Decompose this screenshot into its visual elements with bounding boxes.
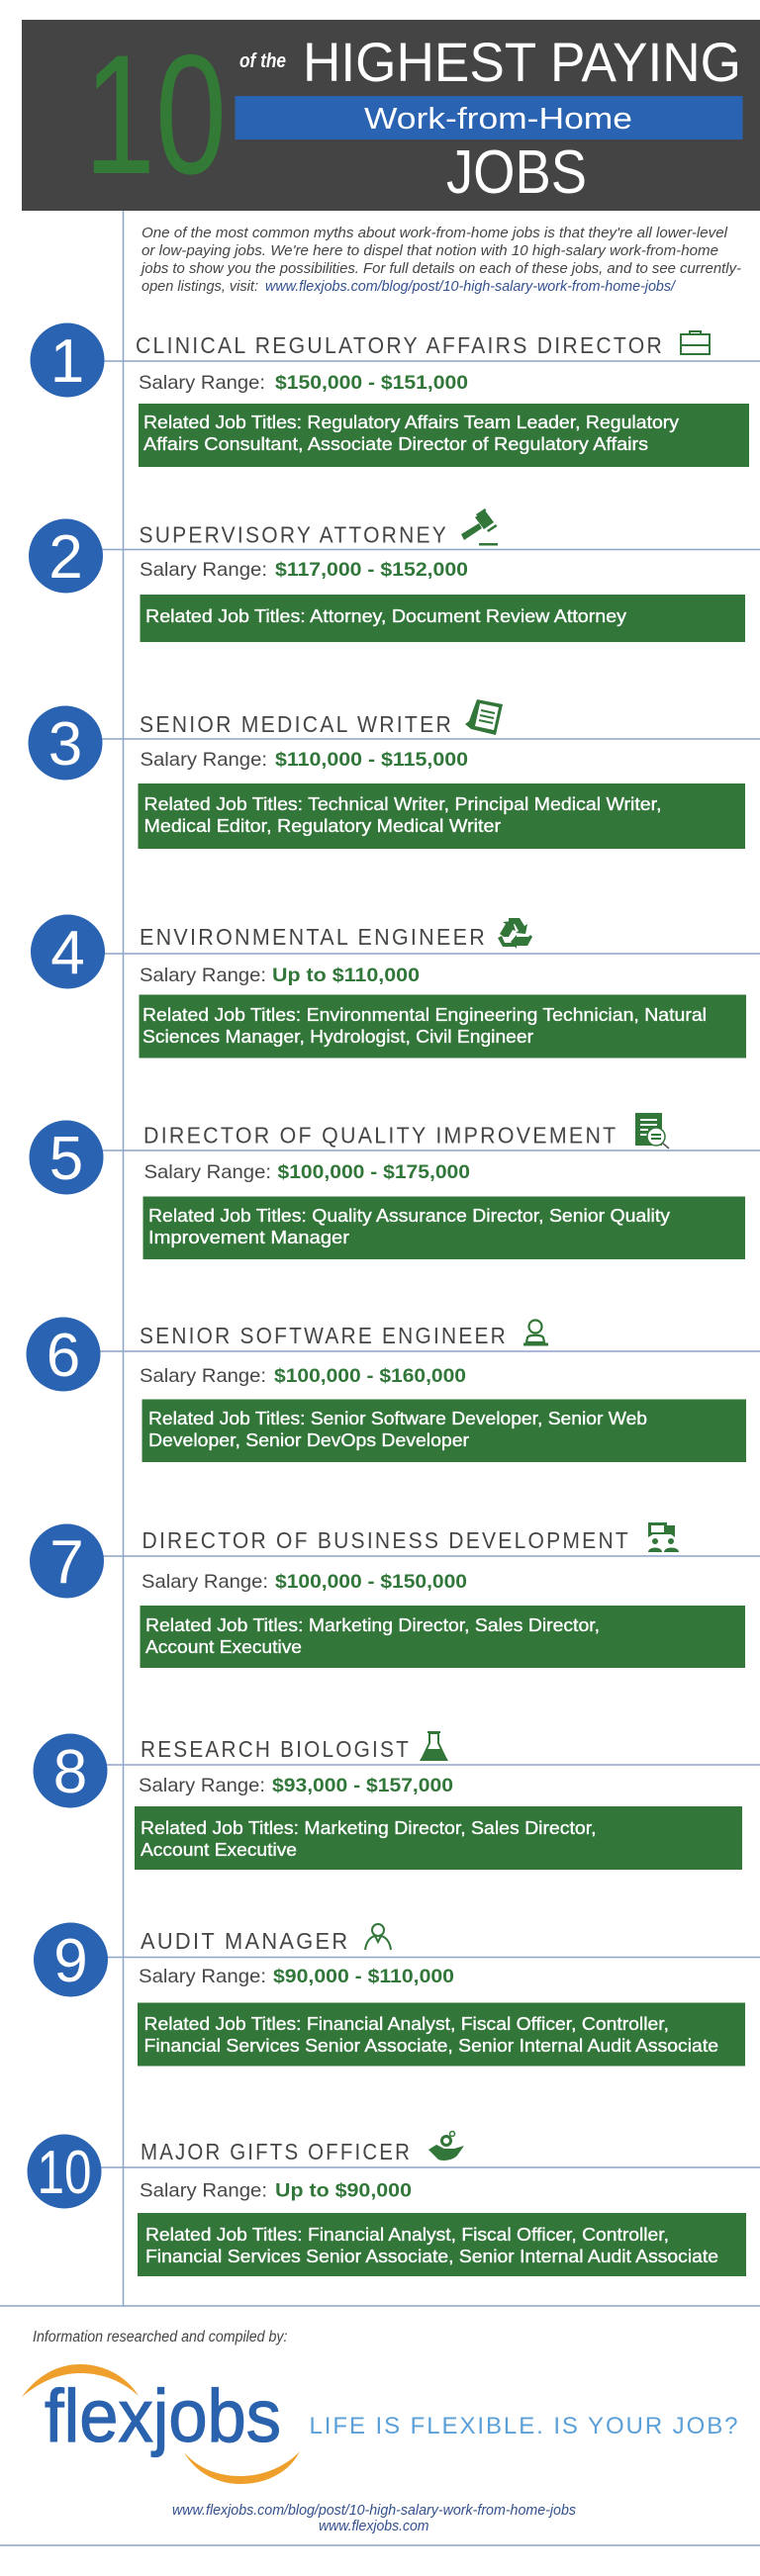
heading: highest paying: HIGHEST PAYING [303,31,741,93]
blue work-from-home band [236,96,742,139]
icon: recycle [498,918,532,949]
salary range 4: Salary Range: [140,965,266,986]
job title 9: AUDIT MANAGER [141,1928,350,1954]
salary range 9: Salary Range: [139,1966,266,1987]
salary range 8: Salary Range: [139,1775,265,1796]
job 3: senior medical writer [28,699,760,849]
related titles 3 [139,783,745,849]
job title 8: RESEARCH BIOLOGIST [141,1736,411,1762]
icon: person with laptop [523,1320,548,1344]
salary range 6: Salary Range: [140,1365,266,1387]
icon: flask [420,1732,448,1761]
job 7: director of business development [30,1522,760,1668]
job 6: senior software engineer [26,1318,760,1462]
salary range 7: Salary Range: [142,1571,268,1593]
job 2: supervisory attorney [29,508,760,642]
salary range 6 [140,1365,466,1387]
footer links [172,2503,576,2534]
related titles 7 [141,1606,745,1668]
related titles 1: Related Job Titles: Regulatory Affairs Team Leader, Regulatory [143,412,680,432]
salary range 1: $150,000 - $151,000 [275,372,468,394]
related titles 7: Account Executive [145,1636,302,1657]
salary range 6: $100,000 - $160,000 [274,1365,466,1387]
number badge 4: 4 [50,919,85,987]
intro text [140,226,741,295]
job title 1: CLINICAL REGULATORY AFFAIRS DIRECTOR [136,332,664,358]
flexjobs logo: flexjobs [45,2374,281,2457]
number badge 4 [31,914,105,989]
number badge 3: 3 [48,710,82,779]
intro text: www.flexjobs.com/blog/post/10-high-salary-work-from-home-jobs/ [265,279,677,295]
job title 7: DIRECTOR OF BUSINESS DEVELOPMENT [142,1527,630,1553]
intro text: One of the most common myths about work-from-home jobs is that they're all lower-level [142,226,728,241]
salary range 8: $93,000 - $157,000 [272,1775,453,1796]
related titles 4: Related Job Titles: Environmental Engineering Technician, Natural [142,1004,707,1025]
related titles 1: Affairs Consultant, Associate Director of Regulatory Affairs [143,433,648,454]
job title 6: SENIOR SOFTWARE ENGINEER [140,1323,508,1348]
number badge 2: 2 [48,523,83,592]
icon: meeting [648,1522,679,1552]
icon: document with magnifier [635,1113,669,1149]
number badge 6 [26,1318,101,1391]
footer links: www.flexjobs.com/blog/post/10-high-salary-work-from-home-jobs [172,2503,576,2519]
salary range 7: $100,000 - $150,000 [275,1571,467,1593]
icon: person [365,1924,391,1950]
salary range 3 [141,749,468,771]
job title 10: MAJOR GIFTS OFFICER [141,2139,412,2164]
number badge 9 [34,1923,108,1996]
salary range 5: Salary Range: [144,1161,271,1183]
related titles 7: Related Job Titles: Marketing Director, Sales Director, [145,1614,600,1635]
icon: document [465,699,503,735]
number badge 7: 7 [49,1528,84,1597]
job title 2: SUPERVISORY ATTORNEY [139,522,448,548]
big number 10: 10 [84,20,227,210]
job 10: major gifts officer [28,2131,760,2276]
related titles 2: Related Job Titles: Attorney, Document Review Attorney [145,605,627,626]
salary range 2: Salary Range: [140,559,267,581]
number badge 9: 9 [53,1927,88,1995]
related titles 3: Medical Editor, Regulatory Medical Writer [144,815,501,836]
number badge 3 [28,706,103,780]
related titles 3: Related Job Titles: Technical Writer, Principal Medical Writer, [144,793,661,814]
related titles 5: Related Job Titles: Quality Assurance Director, Senior Quality [148,1205,671,1226]
credit line: Information researched and compiled by: [33,2329,287,2346]
number badge 6: 6 [47,1322,80,1390]
related titles 9 [138,2002,745,2066]
number badge 8: 8 [53,1738,87,1806]
related titles 1 [139,404,749,467]
salary range 10 [140,2180,412,2202]
salary range 2: $117,000 - $152,000 [275,559,468,581]
blue work-from-home band: Work-from-Home [364,101,632,136]
related titles 2 [141,595,745,642]
salary range 9: $90,000 - $110,000 [273,1966,454,1987]
salary range 8 [139,1775,453,1796]
salary range 3: Salary Range: [141,749,267,771]
related titles 6: Developer, Senior DevOps Developer [148,1429,469,1450]
related titles 10: Financial Services Senior Associate, Senior Internal Audit Associate [145,2246,718,2266]
related titles 6: Related Job Titles: Senior Software Developer, Senior Web [148,1408,647,1428]
related titles 9: Related Job Titles: Financial Analyst, Fiscal Officer, Controller, [144,2013,669,2034]
heading: jobs: JOBS [446,138,587,207]
salary range 1 [139,372,468,394]
related titles 4 [139,995,746,1058]
intro text: or low-paying jobs. We're here to dispel that notion with 10 high-salary work-from-home [142,243,718,259]
tagline: LIFE IS FLEXIBLE. IS YOUR JOB? [309,2413,738,2439]
related titles 10 [138,2213,746,2276]
number badge 5: 5 [49,1125,83,1193]
related titles 5: Improvement Manager [148,1227,349,1247]
intro text: jobs to show you the possibilities. For full details on each of these jobs, and to see currently- [140,261,741,277]
job 9: audit manager [34,1923,760,2066]
related titles 4: Sciences Manager, Hydrologist, Civil Engineer [142,1026,533,1047]
salary range 5: $100,000 - $175,000 [277,1161,470,1183]
job title 3: SENIOR MEDICAL WRITER [140,711,453,737]
salary range 1: Salary Range: [139,372,265,394]
salary range 10: Up to $90,000 [275,2180,412,2202]
salary range 4: Up to $110,000 [272,965,420,986]
number badge 1 [30,322,105,398]
job 8: research biologist [34,1732,760,1870]
salary range 5 [144,1161,470,1183]
job 5: director of quality improvement [30,1113,760,1259]
number badge 7 [30,1523,104,1599]
job title 5: DIRECTOR OF QUALITY IMPROVEMENT [143,1122,618,1148]
icon: briefcase [681,331,710,354]
salary range 9 [139,1966,454,1987]
related titles 8 [135,1806,742,1870]
related titles 8: Related Job Titles: Marketing Director, Sales Director, [141,1817,596,1838]
intro text: open listings, visit: [142,279,258,295]
icon: gavel [461,508,498,546]
job 1: clinical regulatory affairs director [30,322,760,467]
of the: of the [239,50,286,72]
flexjobs logo [22,2364,300,2484]
number badge 8 [34,1733,107,1808]
number badge 5 [30,1120,103,1195]
salary range 10: Salary Range: [140,2180,267,2202]
number badge 2 [29,518,103,594]
number badge 10: 10 [38,2139,91,2207]
related titles 5 [142,1197,745,1259]
related titles 6 [142,1399,746,1462]
related titles 10: Related Job Titles: Financial Analyst, Fiscal Officer, Controller, [145,2224,669,2245]
salary range 2 [140,559,468,581]
salary range 3: $110,000 - $115,000 [275,749,468,771]
footer links: www.flexjobs.com [319,2519,429,2534]
salary range 7 [142,1571,467,1593]
related titles 8: Account Executive [141,1839,297,1860]
related titles 9: Financial Services Senior Associate, Senior Internal Audit Associate [144,2035,718,2056]
job title 4: ENVIRONMENTAL ENGINEER [140,924,487,950]
number badge 1: 1 [50,327,84,396]
salary range 4 [140,965,420,986]
header banner [22,20,760,211]
icon: hand with coins [428,2131,464,2161]
job 4: environmental engineer [31,914,760,1058]
